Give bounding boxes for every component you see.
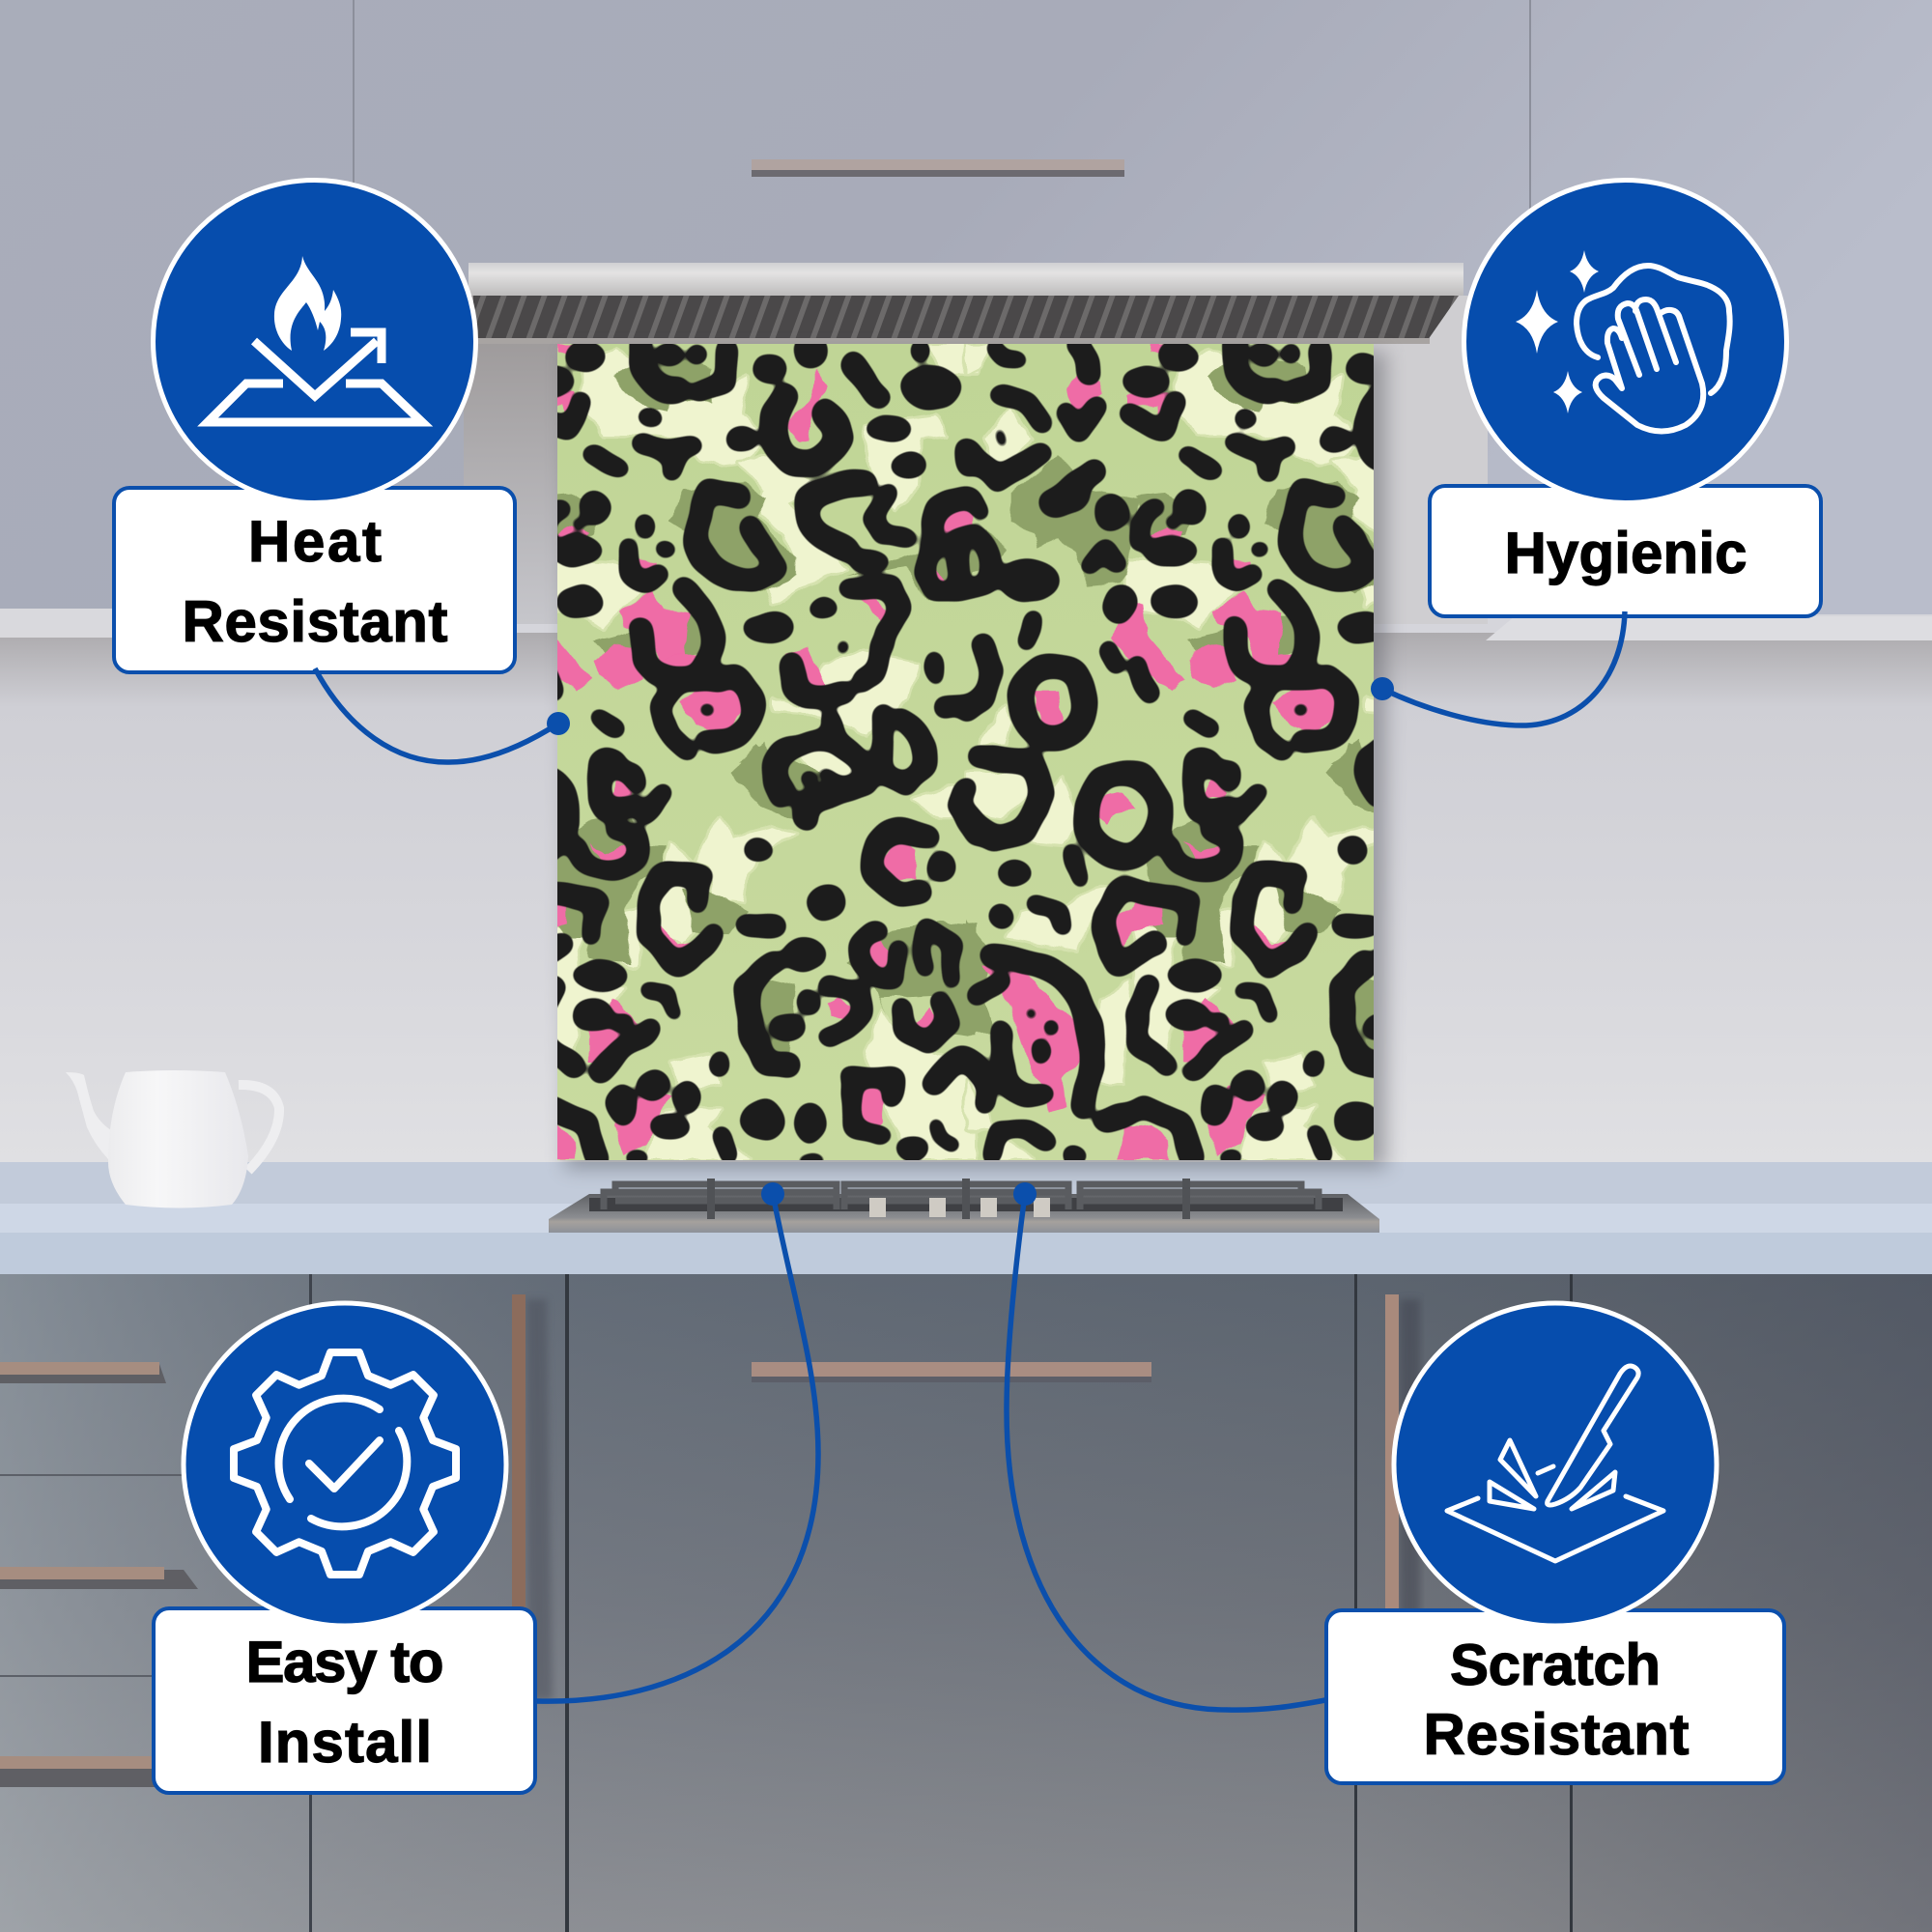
connector: scratch resistant to panel bbox=[1007, 1182, 1325, 1710]
cooker hood bbox=[469, 263, 1463, 344]
icon: hand wiping with sparkles bbox=[1464, 180, 1787, 502]
label: hygienic bbox=[1430, 486, 1821, 616]
icon: knife scratching surface bbox=[1394, 1303, 1717, 1626]
label: heat resistant: Resistant bbox=[182, 589, 448, 654]
label: easy to install bbox=[154, 1608, 535, 1793]
cabinet underside strips bbox=[0, 609, 1932, 640]
icon: flame over surface bbox=[153, 180, 475, 502]
feature: heat resistant bbox=[114, 180, 515, 672]
feature: easy to install bbox=[154, 1303, 535, 1793]
label: scratch resistant: Resistant bbox=[1424, 1702, 1690, 1767]
label: heat resistant bbox=[114, 488, 515, 672]
label: easy to install: Easy to bbox=[245, 1630, 444, 1694]
label: scratch resistant bbox=[1326, 1610, 1784, 1783]
connector: heat resistant to panel bbox=[315, 668, 570, 762]
icon: gear with check mark bbox=[184, 1303, 506, 1626]
leopard print splashback panel bbox=[557, 344, 1374, 1160]
feature: scratch resistant bbox=[1326, 1303, 1784, 1783]
label: scratch resistant: Scratch bbox=[1450, 1633, 1661, 1697]
label: easy to install: Install bbox=[258, 1710, 432, 1775]
lower cabinets bbox=[0, 1274, 1932, 1932]
gas hob bbox=[549, 1179, 1379, 1233]
connector: hygienic to panel bbox=[1371, 611, 1625, 725]
label: hygienic: Hygienic bbox=[1505, 521, 1747, 585]
cabinet handle bbox=[752, 159, 1124, 177]
connector: easy to install to panel bbox=[536, 1182, 818, 1701]
teapot bbox=[66, 1070, 279, 1208]
label: heat resistant: Heat bbox=[248, 509, 382, 574]
wall bbox=[0, 633, 1932, 1164]
feature: hygienic bbox=[1430, 180, 1821, 616]
upper cabinets bbox=[0, 0, 1932, 614]
counter bbox=[0, 1162, 1932, 1275]
panel shadow bbox=[565, 352, 1386, 1169]
